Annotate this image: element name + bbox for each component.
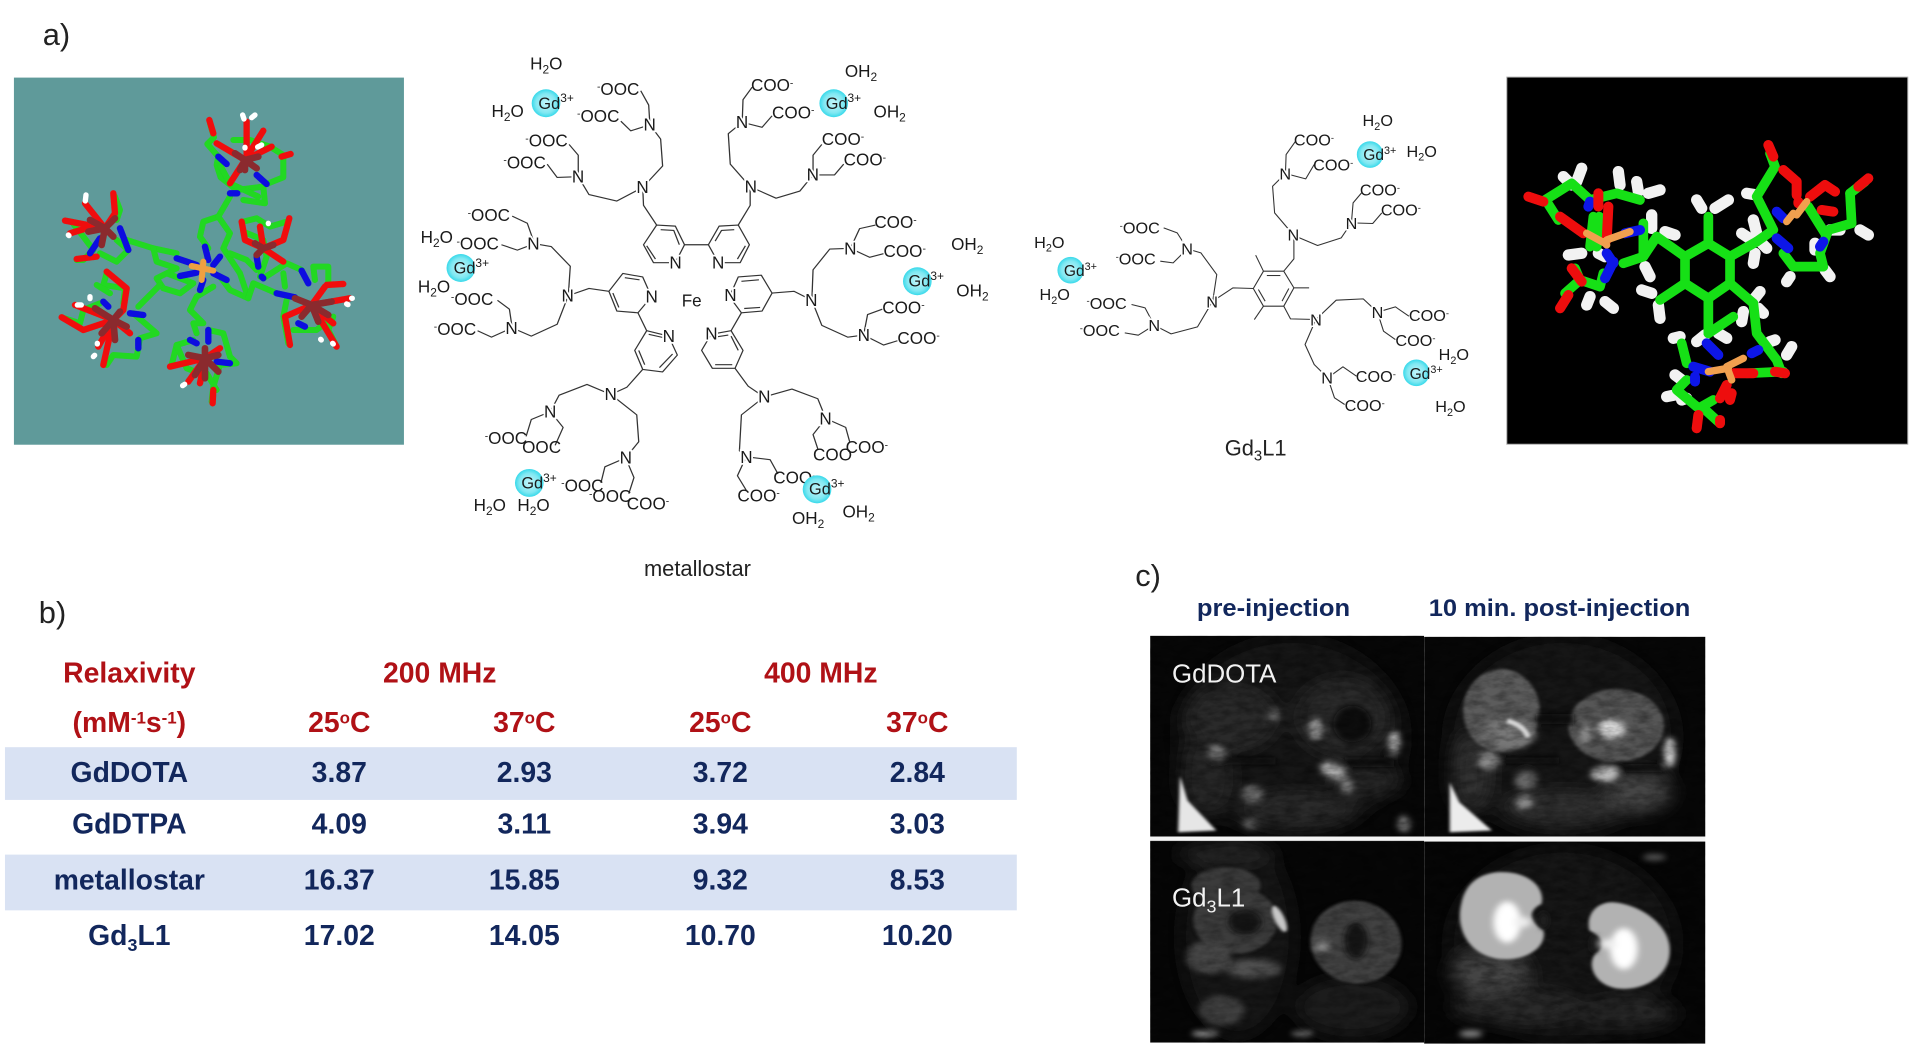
carboxylate labels: COO xyxy=(773,469,812,488)
labels: 2 xyxy=(1450,355,1456,367)
water labels: 2 xyxy=(977,243,984,257)
water labels: H xyxy=(491,102,504,121)
water labels: O xyxy=(493,496,506,515)
row band: metallostar xyxy=(5,855,1017,910)
labels: N xyxy=(1310,312,1322,329)
header row 2: -1 xyxy=(162,708,177,727)
labels: OOC xyxy=(1123,220,1160,237)
header row 2: o xyxy=(525,708,535,727)
carboxylate labels: - xyxy=(577,109,581,120)
labels: COO xyxy=(1409,307,1446,325)
nitrogen labels: N xyxy=(663,327,675,346)
column heading: pre-injection: pre-injection xyxy=(1197,595,1350,622)
labels: COO xyxy=(1313,157,1350,175)
gadolinium ions: Gd xyxy=(538,95,560,113)
header row 1 xyxy=(63,658,878,690)
water labels: O xyxy=(536,496,550,515)
carboxylate labels: COO xyxy=(846,438,885,457)
carboxylate labels: - xyxy=(812,471,816,482)
red carboxylate bonds xyxy=(62,120,350,403)
molecule: Gd3L1 sticks xyxy=(1528,145,1868,428)
carboxylate labels: - xyxy=(597,82,600,93)
red oxygens xyxy=(1528,145,1868,428)
carboxylate labels: COO xyxy=(737,487,776,506)
water labels: 2 xyxy=(982,290,989,304)
carboxylate labels: - xyxy=(525,134,529,145)
row: metallostar xyxy=(54,864,945,896)
row: Gd3L1 xyxy=(88,920,953,955)
carboxylate labels: - xyxy=(936,331,940,342)
water labels: H xyxy=(421,228,433,247)
labels: 3+ xyxy=(1384,145,1396,157)
labels: H xyxy=(1407,143,1418,161)
labels: 2 xyxy=(1447,407,1453,419)
row: Gd3L1: 3 xyxy=(128,935,138,955)
carboxylate labels: OOC xyxy=(522,438,561,457)
header row 2: C xyxy=(350,707,370,739)
orange gadolinium xyxy=(1587,202,1807,380)
row: Gd3L1: L1 xyxy=(137,920,171,952)
labels: 3+ xyxy=(1085,261,1097,273)
water labels: 2 xyxy=(530,504,537,518)
blue nitrogens xyxy=(1588,202,1823,382)
row band: GdDOTA xyxy=(5,747,1017,800)
carboxylate labels: - xyxy=(503,156,507,167)
labels: COO xyxy=(1381,202,1418,219)
water labels: O xyxy=(511,102,524,121)
carboxylate labels: OOC xyxy=(581,107,619,126)
MRI: Gd3L1 post-injection xyxy=(1424,842,1705,1044)
labels: 3+ xyxy=(1430,364,1443,376)
row: GdDOTA: 3.87 xyxy=(312,757,367,789)
carboxylate labels: - xyxy=(811,106,814,117)
divider between MRI rows xyxy=(1150,837,1705,841)
labels: N xyxy=(1287,227,1299,244)
caption: Gd3L1: 3 xyxy=(1254,448,1262,465)
carboxylate labels: - xyxy=(885,440,888,451)
header row 2: 25 xyxy=(689,707,721,739)
gadolinium ions: 3+ xyxy=(560,91,574,105)
labels: - xyxy=(1397,182,1400,193)
carboxylate labels: COO xyxy=(844,151,883,170)
header row 2: o xyxy=(340,708,350,727)
carboxylate labels: - xyxy=(883,153,886,164)
row: GdDTPA: 3.03 xyxy=(890,809,945,841)
gadolinium ions: 3+ xyxy=(831,477,844,491)
green carbon framework xyxy=(1545,153,1865,423)
carboxylate labels: COO xyxy=(882,298,921,317)
carboxylate labels: - xyxy=(922,244,926,255)
row: GdDOTA: GdDOTA xyxy=(71,757,188,789)
header row 2: -1 xyxy=(131,708,146,727)
carboxylate labels: OOC xyxy=(600,80,639,99)
nitrogen labels: N xyxy=(544,403,556,422)
orange iron centre xyxy=(192,262,213,280)
nitrogen labels: N xyxy=(736,113,748,132)
carboxylate labels: OOC xyxy=(529,132,568,151)
labels: N xyxy=(1181,241,1193,258)
water labels: 2 xyxy=(542,63,549,77)
carboxylate labels: COO xyxy=(897,329,936,348)
green carbon framework xyxy=(62,123,337,402)
header row 2: o xyxy=(721,708,731,727)
water labels: H xyxy=(517,496,530,515)
nitrogen labels: N xyxy=(636,178,649,197)
carboxylate labels: - xyxy=(451,292,454,303)
labels: - xyxy=(1418,202,1421,213)
labels: OOC xyxy=(1083,322,1120,340)
nitrogen labels: N xyxy=(805,291,817,310)
row: Gd3L1: 10.70 xyxy=(685,920,756,952)
white hydrogen tips xyxy=(68,115,352,386)
panel label b): b) xyxy=(39,595,66,630)
nitrogen labels: N xyxy=(758,388,770,407)
water labels: OH xyxy=(956,282,982,301)
labels: N xyxy=(1148,317,1160,335)
water labels: O xyxy=(549,55,562,74)
image label: Gd3L1: Gd xyxy=(1172,884,1207,912)
labels: H xyxy=(1363,112,1374,130)
labels: H xyxy=(1034,234,1046,252)
carboxylate labels: COO xyxy=(751,76,790,95)
water labels: OH xyxy=(951,235,977,254)
labels: O xyxy=(1380,112,1393,130)
nitrogen labels: N xyxy=(858,326,870,345)
labels: - xyxy=(1446,308,1449,319)
labels: 2 xyxy=(1418,152,1424,164)
carboxylate labels: - xyxy=(790,78,793,89)
white hydrogens xyxy=(1563,168,1868,400)
labels: H xyxy=(1040,286,1051,304)
labels: - xyxy=(1087,295,1090,306)
labels: O xyxy=(1052,234,1064,252)
header row 2: s xyxy=(146,707,162,739)
carboxylate labels: - xyxy=(434,322,437,333)
row: Gd3L1: 17.02 xyxy=(304,920,375,952)
carboxylate labels: - xyxy=(468,208,471,219)
nitrogen labels: N xyxy=(572,167,584,186)
nitrogen labels: N xyxy=(724,286,737,305)
gadolinium ions: 3+ xyxy=(475,256,489,270)
header row 2: 37 xyxy=(886,707,918,739)
carboxylate labels xyxy=(434,76,940,513)
water labels: OH xyxy=(792,509,818,528)
carboxylate labels: OOC xyxy=(437,320,476,339)
row: GdDOTA: 2.93 xyxy=(497,757,552,789)
column heading: post-injection: 10 min. post-injection xyxy=(1429,595,1690,622)
carboxylate labels: COO xyxy=(772,103,811,122)
carboxylate labels: COO xyxy=(874,213,913,232)
water labels: OH xyxy=(874,103,899,122)
row: GdDTPA: 4.09 xyxy=(312,809,367,841)
gadolinium ions: Gd xyxy=(521,475,543,493)
water labels: 2 xyxy=(486,504,493,518)
MRI: GdDOTA pre-injection xyxy=(1150,636,1424,837)
carboxylate labels: OOC xyxy=(471,206,510,225)
row: GdDTPA: 3.11 xyxy=(498,809,551,841)
row: metallostar: 15.85 xyxy=(489,864,560,896)
carboxylate labels: OOC xyxy=(488,429,527,448)
water labels: O xyxy=(437,277,450,296)
labels: - xyxy=(1432,333,1436,343)
nitrogen labels xyxy=(505,113,870,468)
carboxylate labels: - xyxy=(666,497,669,508)
row: GdDOTA: 2.84 xyxy=(890,757,945,789)
nitrogen labels: N xyxy=(620,449,632,468)
row: GdDTPA: GdDTPA xyxy=(72,809,187,841)
row: GdDOTA xyxy=(71,757,945,789)
blue nitrogen bonds xyxy=(90,157,308,363)
panel label a): a) xyxy=(43,17,70,52)
nitrogen labels: N xyxy=(562,287,574,306)
labels: COO xyxy=(1360,182,1397,199)
header row 2: ) xyxy=(177,707,186,739)
nitrogen labels: N xyxy=(745,177,757,196)
water labels: 2 xyxy=(430,285,437,299)
nitrogen labels: N xyxy=(644,115,656,134)
nitrogen labels: N xyxy=(669,254,682,273)
row: metallostar: 8.53 xyxy=(890,864,945,896)
carboxylate labels: COO xyxy=(822,130,861,149)
labels: - xyxy=(1331,132,1334,143)
row: Gd3L1: 10.20 xyxy=(882,920,953,952)
labels: - xyxy=(1393,369,1396,379)
row: Gd3L1: Gd xyxy=(88,920,128,952)
labels: COO xyxy=(1356,368,1393,386)
caption: Gd3L1: Gd xyxy=(1225,436,1254,461)
nitrogen labels: Fe xyxy=(682,291,702,310)
labels: O xyxy=(1453,398,1466,416)
header row 2: 37 xyxy=(493,707,525,739)
carboxylate labels: - xyxy=(913,215,917,226)
gadolinium ions xyxy=(447,89,944,503)
water labels: 2 xyxy=(818,517,825,531)
header row 2: C xyxy=(928,707,948,739)
carboxylate labels: OOC xyxy=(460,235,499,254)
labels: N xyxy=(1346,215,1357,233)
gadolinium ions: Gd xyxy=(826,95,848,113)
gadolinium ions: 3+ xyxy=(930,269,944,283)
carboxylate labels: - xyxy=(921,301,925,312)
labels: COO xyxy=(1345,397,1382,415)
nitrogen labels: N xyxy=(807,166,819,185)
image label: Gd3L1: 3 xyxy=(1207,896,1217,916)
carboxylate labels: - xyxy=(861,132,864,143)
header row 1: 400 MHz xyxy=(764,658,878,690)
header row 2: 25 xyxy=(308,707,340,739)
header row 2: C xyxy=(731,707,751,739)
carboxylate labels: OOC xyxy=(454,290,493,309)
labels: 2 xyxy=(1374,121,1380,133)
water labels: 2 xyxy=(504,110,511,124)
water labels: 2 xyxy=(871,70,878,84)
labels: - xyxy=(1120,220,1123,231)
labels xyxy=(1034,112,1469,419)
water labels: H xyxy=(530,55,542,74)
molecule: metallostar sticks xyxy=(62,115,352,403)
nitrogen labels: N xyxy=(505,319,518,338)
labels: N xyxy=(1372,304,1383,322)
labels: - xyxy=(1382,398,1385,408)
row: GdDTPA xyxy=(72,809,945,841)
nitrogen labels: N xyxy=(740,448,753,467)
nitrogen labels: N xyxy=(605,385,617,404)
water labels: OH xyxy=(845,62,871,81)
carboxylate labels: - xyxy=(776,489,780,500)
row: metallostar: metallostar xyxy=(54,864,205,896)
labels: Gd xyxy=(1410,366,1430,383)
row: GdDOTA: 3.72 xyxy=(693,757,748,789)
labels: OOC xyxy=(1090,295,1127,313)
carboxylate labels: - xyxy=(589,489,592,500)
header row 2: (mM xyxy=(73,707,131,739)
chemical structure: Gd3L1 xyxy=(1034,112,1469,419)
labels: OOC xyxy=(1119,251,1156,268)
water labels: O xyxy=(440,228,453,247)
header row 2: C xyxy=(535,707,555,739)
chemical structure: metallostar xyxy=(418,55,989,531)
nitrogen labels: N xyxy=(844,239,856,258)
nitrogen labels: N xyxy=(712,254,724,273)
header row 1: Relaxivity xyxy=(63,658,196,690)
water labels: 2 xyxy=(433,236,440,250)
gadolinium ions: 3+ xyxy=(543,471,557,485)
bonds xyxy=(478,87,897,494)
carboxylate labels: OOC xyxy=(592,487,631,506)
gadolinium ions: Gd xyxy=(909,273,930,291)
labels: - xyxy=(1080,323,1083,333)
water labels xyxy=(418,55,989,531)
labels: H xyxy=(1435,398,1447,416)
labels: COO xyxy=(1395,332,1432,350)
image label: Gd3L1: L1 xyxy=(1216,884,1245,912)
labels: Gd xyxy=(1363,147,1384,164)
water labels: H xyxy=(418,277,430,296)
labels: N xyxy=(1206,294,1218,311)
row: metallostar: 9.32 xyxy=(693,864,748,896)
header row 2 xyxy=(73,707,948,739)
labels: 2 xyxy=(1046,243,1052,255)
carboxylate labels: OOC xyxy=(565,476,604,495)
carboxylate labels: - xyxy=(456,237,460,248)
row: Gd3L1: 14.05 xyxy=(489,920,560,952)
labels: - xyxy=(1116,251,1119,262)
panel: Gd3L1 3D model on black xyxy=(1507,77,1908,444)
nitrogen labels: N xyxy=(819,410,832,429)
carboxylate labels: - xyxy=(561,479,565,490)
carboxylate labels: COO xyxy=(813,445,852,464)
dark red metal stars xyxy=(88,153,332,378)
labels: O xyxy=(1424,143,1437,161)
carboxylate labels: OOC xyxy=(507,153,546,172)
caption: Gd3L1: L1 xyxy=(1262,436,1287,461)
labels: Gd xyxy=(1064,263,1085,280)
MRI: Gd3L1 pre-injection xyxy=(1150,837,1424,1043)
row: GdDTPA: 3.94 xyxy=(693,809,748,841)
labels: COO xyxy=(1294,132,1331,150)
nitrogen labels: N xyxy=(646,287,658,306)
labels: O xyxy=(1456,346,1469,364)
water labels: H xyxy=(474,496,486,515)
carboxylate labels: COO xyxy=(627,494,666,513)
panel label c): c) xyxy=(1135,558,1161,593)
labels: H xyxy=(1439,346,1450,364)
panel: metallostar 3D model on teal xyxy=(14,78,404,445)
labels: N xyxy=(1321,370,1333,387)
gadolinium ions: 3+ xyxy=(848,91,861,105)
bonds xyxy=(1125,141,1409,405)
water labels: 2 xyxy=(899,111,906,125)
labels: - xyxy=(1350,157,1353,168)
nitrogen labels: N xyxy=(705,325,718,344)
carboxylate labels: COO xyxy=(883,242,922,261)
gadolinium ions: Gd xyxy=(809,480,831,498)
water labels: OH xyxy=(842,502,868,521)
MRI: GdDOTA post-injection xyxy=(1424,637,1705,837)
carboxylate labels: - xyxy=(485,431,488,442)
labels: 2 xyxy=(1051,295,1057,307)
labels: O xyxy=(1057,286,1070,304)
water labels: 2 xyxy=(868,510,875,524)
image label: GdDOTA: GdDOTA xyxy=(1172,661,1277,689)
gadolinium ions: Gd xyxy=(454,260,475,278)
header row 2: o xyxy=(918,708,928,727)
table: relaxivity xyxy=(5,658,1017,955)
labels: N xyxy=(1279,166,1291,184)
header row 1: 200 MHz xyxy=(383,658,496,690)
nitrogen labels: N xyxy=(527,234,540,253)
panel: MRI images xyxy=(1150,636,1705,1044)
row: metallostar: 16.37 xyxy=(304,864,375,896)
caption: metallostar: metallostar xyxy=(644,556,751,581)
